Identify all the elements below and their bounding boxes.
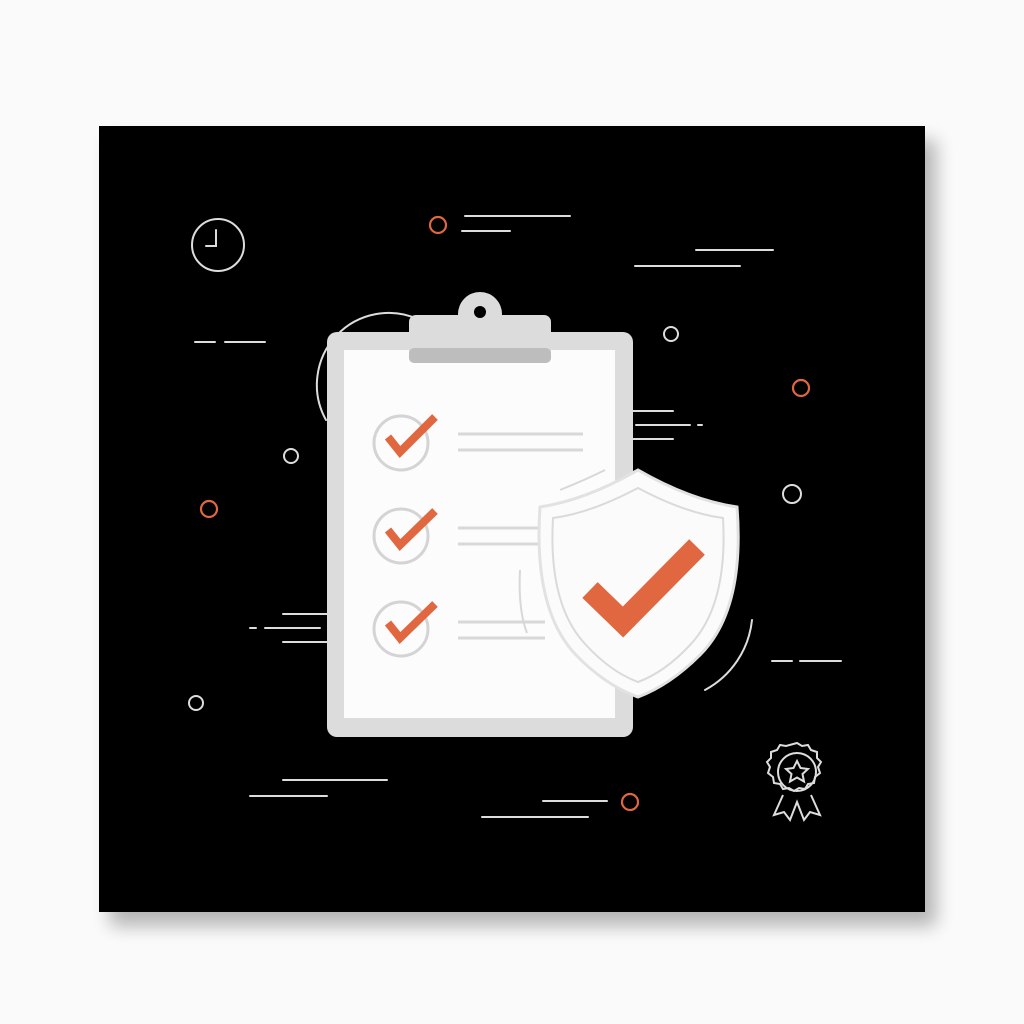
panel: black background: [99, 126, 925, 912]
shield: [539, 470, 738, 697]
clipboard: [327, 292, 633, 737]
icon: award badge: [767, 743, 821, 820]
icon: clock: [192, 219, 244, 271]
shield check: [590, 547, 697, 622]
checklist items: [374, 416, 605, 656]
clip: [409, 292, 551, 363]
panel shadow: [110, 140, 936, 926]
decorations: [189, 216, 841, 817]
